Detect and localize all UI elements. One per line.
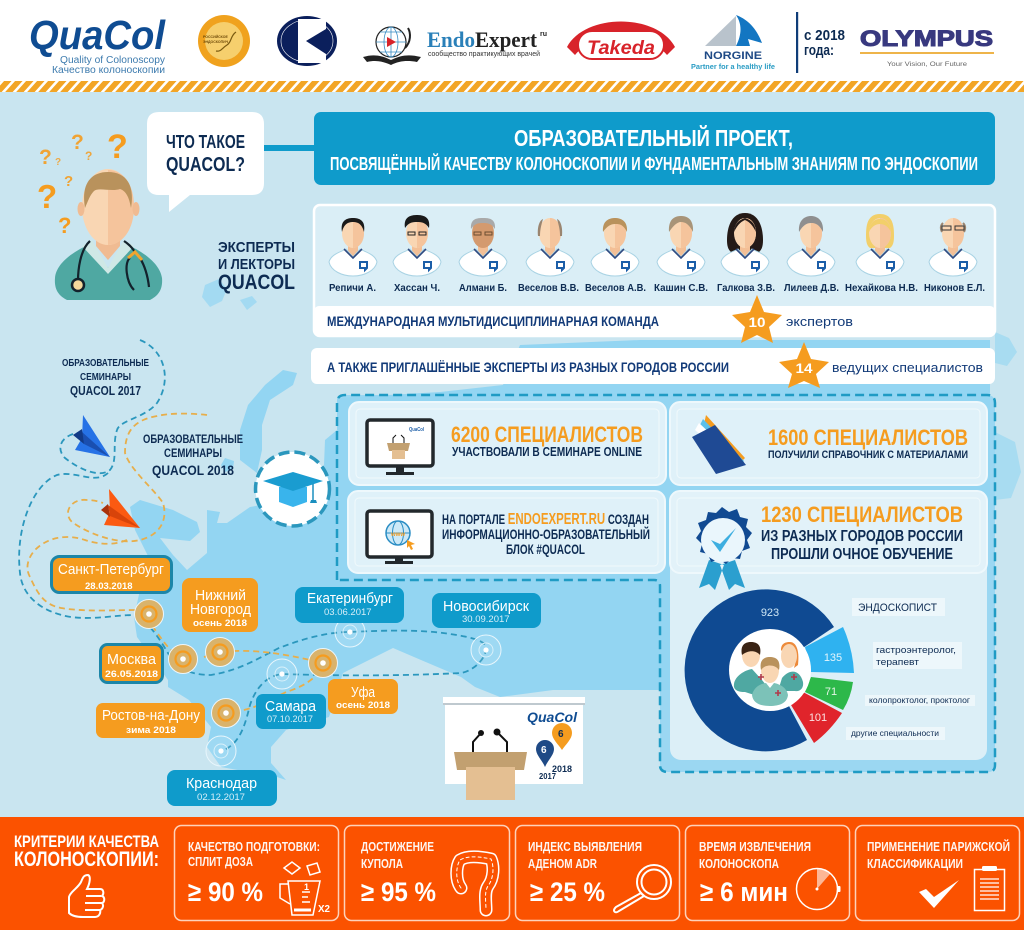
question marks: ? bbox=[64, 173, 73, 190]
city: Krasnodar: 02.12.2017 bbox=[197, 792, 245, 803]
strip: international team: МЕЖДУНАРОДНАЯ МУЛЬТИДИСЦИПЛИНАРНАЯ КОМАНДА bbox=[327, 314, 659, 329]
chart legend: ЭНДОСКОПИСТ bbox=[858, 602, 937, 614]
card: in-person training and chart bbox=[670, 491, 987, 760]
speech bubble: what is QuaCol: QUACOL? bbox=[166, 154, 245, 176]
city: Samara: 07.10.2017 bbox=[267, 714, 313, 725]
label: seminars 2017: СЕМИНАРЫ bbox=[80, 371, 131, 383]
logo: Takeda bbox=[567, 22, 675, 59]
box: cecum reach: ДОСТИЖЕНИЕ bbox=[361, 840, 434, 854]
illustration: podium and board: 2017 bbox=[539, 772, 557, 781]
logo: Takeda: Takeda bbox=[587, 38, 655, 59]
city: Novosibirsk: 30.09.2017 bbox=[462, 614, 510, 625]
divider and since 2018 label bbox=[796, 12, 845, 73]
logo: endoscopy society seal: РОССИЙСКОЕ bbox=[203, 35, 228, 39]
stat area dashed frame bbox=[337, 395, 995, 772]
expert: Repichi bbox=[329, 218, 377, 276]
speech bubble: what is QuaCol: ЧТО ТАКОЕ bbox=[166, 132, 245, 152]
icon: book bbox=[692, 415, 746, 474]
footer heading bbox=[14, 833, 159, 871]
card: handbook: 1600 СПЕЦИАЛИСТОВ bbox=[768, 425, 968, 450]
city: Yekaterinburg: 03.06.2017 bbox=[324, 607, 372, 618]
donut chart: 135 bbox=[824, 652, 842, 664]
footer heading: КРИТЕРИИ КАЧЕСТВА bbox=[14, 833, 159, 851]
city: Nizhny Novgorod bbox=[182, 578, 258, 632]
icon: measuring jug: 1 bbox=[304, 882, 309, 892]
chart legend: терапевт bbox=[876, 657, 920, 668]
logo: QuaCol bbox=[29, 12, 166, 76]
card: online seminar bbox=[349, 402, 666, 485]
city: Novosibirsk: Новосибирск bbox=[443, 598, 529, 615]
card: endoexpert portal: ИНФОРМАЦИОННО-ОБРАЗОВАТЕЛЬНЫЙ bbox=[442, 527, 650, 542]
logo: Olympus: Your Vision, Our Future bbox=[887, 61, 967, 68]
heading: experts and lecturers: ЭКСПЕРТЫ bbox=[218, 239, 295, 256]
expert: Veselov A.V. bbox=[591, 218, 639, 276]
icon: magnifying glass bbox=[614, 865, 671, 912]
city: Saint Petersburg bbox=[52, 556, 172, 592]
label: seminars 2018: QUACOL 2018 bbox=[152, 462, 234, 478]
card: in-person training and chart: 1230 СПЕЦИАЛИСТОВ bbox=[761, 502, 963, 527]
panel: experts bbox=[314, 205, 995, 336]
expert names: Хассан Ч. bbox=[394, 282, 440, 294]
city: Moscow: Москва bbox=[107, 651, 157, 668]
strip: international team: 10 bbox=[748, 314, 766, 330]
illustration: podium and board: 6 bbox=[558, 729, 564, 740]
heading: experts and lecturers: QUACOL bbox=[218, 271, 295, 294]
expert: Nekhaikova bbox=[856, 214, 904, 276]
icon: doctor with question marks bbox=[37, 128, 162, 300]
box: withdrawal time: ≥ 6 мин bbox=[700, 877, 788, 907]
logo: Norgine bbox=[691, 15, 775, 71]
chart legend bbox=[846, 598, 975, 740]
city: Saint Petersburg: 28.03.2018 bbox=[85, 581, 133, 592]
chart legend: колопроктолог, проктолог bbox=[869, 696, 970, 705]
expert: Lileev bbox=[787, 216, 835, 276]
icon: blue paper plane bbox=[73, 415, 110, 457]
logo: Olympus bbox=[860, 26, 994, 68]
expert names: Веселов В.В. bbox=[518, 282, 579, 294]
box: cecum reach: ≥ 95 % bbox=[361, 877, 436, 907]
expert: Almani bbox=[459, 218, 507, 276]
strip: invited experts: А ТАКЖЕ ПРИГЛАШЁННЫЕ ЭКСПЕРТЫ ИЗ РАЗНЫХ ГОРОДОВ РОССИИ bbox=[327, 360, 729, 375]
city: Ufa bbox=[328, 679, 398, 714]
divider and since 2018 label: с 2018 bbox=[804, 27, 845, 44]
logo: EndoExpert bbox=[363, 27, 547, 65]
question marks: ? bbox=[71, 131, 84, 154]
illustration: podium and board: 6 bbox=[541, 745, 547, 756]
box: withdrawal time: КОЛОНОСКОПА bbox=[699, 857, 779, 871]
question marks: ? bbox=[58, 213, 71, 238]
icon: award rosette bbox=[696, 507, 752, 590]
box: withdrawal time: ВРЕМЯ ИЗВЛЕЧЕНИЯ bbox=[699, 840, 811, 854]
logo: endoscopy society seal: ЭНДОСКОПИЧ. bbox=[203, 40, 229, 44]
icon: monitor with podium: QuaCol bbox=[409, 427, 425, 433]
city: Yekaterinburg bbox=[295, 587, 404, 623]
icon: graduation cap bbox=[256, 452, 330, 526]
heading: experts and lecturers: И ЛЕКТОРЫ bbox=[218, 256, 295, 273]
donut chart: 101 bbox=[809, 712, 827, 724]
logo: endoscopy society seal bbox=[198, 15, 250, 67]
expert: Veselov V.V. bbox=[526, 218, 574, 276]
strip: international team bbox=[314, 295, 995, 343]
card: online seminar: УЧАСТВОВАЛИ В СЕМИНАРЕ ONLINE bbox=[452, 445, 642, 459]
illustration: podium and board: 2018 bbox=[552, 764, 572, 774]
label: seminars 2018: ОБРАЗОВАТЕЛЬНЫЕ bbox=[143, 434, 243, 446]
box: bowel preparation: КАЧЕСТВО ПОДГОТОВКИ: bbox=[188, 840, 320, 854]
donut chart: 71 bbox=[825, 686, 837, 698]
city: Samara bbox=[256, 694, 326, 729]
strip: international team: экспертов bbox=[786, 314, 853, 329]
expert names: Никонов Е.Л. bbox=[924, 282, 985, 294]
expert: Galkova bbox=[721, 213, 769, 276]
box: bowel preparation: ≥ 90 % bbox=[188, 877, 263, 907]
illustration: podium and board: QuaCol bbox=[527, 709, 578, 725]
icon: check mark bbox=[919, 880, 959, 908]
logo: QuaCol: Качество колоноскопии bbox=[52, 65, 165, 76]
icon: monitor with globe bbox=[367, 511, 432, 564]
city: Krasnodar bbox=[167, 770, 277, 806]
logo: Olympus: OLYMPUS bbox=[860, 26, 993, 51]
icon: clipboard bbox=[974, 866, 1004, 910]
donut chart: 923 bbox=[761, 607, 779, 619]
icon: colon bbox=[457, 857, 493, 910]
illustration: podium and board bbox=[443, 697, 585, 800]
title banner bbox=[314, 112, 995, 185]
logo: coloproctology association bbox=[277, 16, 337, 66]
city: Nizhny Novgorod: Новгород bbox=[190, 601, 251, 618]
box: ADR index: ≥ 25 % bbox=[530, 877, 605, 907]
icon: timer bbox=[796, 868, 840, 910]
connector bbox=[264, 145, 316, 151]
card: endoexpert portal: БЛОК #QUACOL bbox=[506, 542, 585, 557]
expert: Nikonov bbox=[929, 218, 977, 276]
icon: monitor with globe: www bbox=[390, 532, 405, 538]
box: bowel preparation: СПЛИТ ДОЗА bbox=[188, 855, 253, 869]
title banner: ОБРАЗОВАТЕЛЬНЫЙ ПРОЕКТ, bbox=[514, 124, 793, 151]
logo: QuaCol: QuaCol bbox=[29, 12, 166, 58]
footer: quality criteria bbox=[0, 817, 1024, 930]
question marks: ? bbox=[39, 146, 52, 169]
city: Novosibirsk bbox=[432, 593, 541, 628]
icon: medical team bbox=[734, 642, 803, 706]
card: handbook bbox=[670, 402, 987, 485]
box: ADR index: ИНДЕКС ВЫЯВЛЕНИЯ bbox=[528, 840, 642, 854]
expert names bbox=[329, 282, 985, 294]
logo: EndoExpert: EndoExpert bbox=[427, 27, 538, 52]
chart legend: другие специальности bbox=[851, 728, 939, 738]
label: seminars 2017: ОБРАЗОВАТЕЛЬНЫЕ bbox=[62, 357, 149, 369]
city: Ufa: осень 2018 bbox=[336, 700, 390, 711]
city: Krasnodar: Краснодар bbox=[186, 775, 257, 792]
card: handbook: ПОЛУЧИЛИ СПРАВОЧНИК С МАТЕРИАЛАМИ bbox=[768, 449, 968, 461]
city: Saint Petersburg: Санкт-Петербург bbox=[58, 561, 164, 578]
expert: Hassan bbox=[393, 215, 441, 276]
city: Ufa: Уфа bbox=[351, 684, 376, 701]
icon: thumbs up bbox=[69, 875, 104, 917]
expert names: Галкова З.В. bbox=[717, 282, 775, 294]
heading: experts and lecturers bbox=[218, 239, 295, 294]
box: Paris classification bbox=[856, 826, 1020, 920]
card: in-person training and chart: ИЗ РАЗНЫХ ГОРОДОВ РОССИИ bbox=[761, 528, 963, 545]
expert names: Лилеев Д.В. bbox=[784, 282, 839, 294]
logo: EndoExpert: сообщество практикующих врачей bbox=[428, 50, 540, 58]
expert names: Репичи А. bbox=[329, 282, 376, 294]
strip: invited experts: 14 bbox=[796, 360, 813, 376]
box: bowel preparation bbox=[174, 826, 338, 920]
logo: QuaCol: Quality of Colonoscopy bbox=[60, 55, 165, 66]
card: endoexpert portal: НА ПОРТАЛЕ ENDOEXPERT.RU СОЗДАН bbox=[442, 511, 649, 528]
city: Rostov-on-Don bbox=[96, 703, 205, 738]
box: ADR index: АДЕНОМ ADR bbox=[528, 857, 597, 871]
question marks: ? bbox=[107, 128, 128, 166]
city: Nizhny Novgorod: осень 2018 bbox=[193, 618, 247, 629]
donut chart bbox=[685, 589, 854, 751]
box: withdrawal time bbox=[686, 826, 850, 920]
label: seminars 2017 bbox=[62, 357, 149, 398]
icon: orange paper plane bbox=[101, 489, 140, 528]
expert names: Веселов А.В. bbox=[585, 282, 646, 294]
logo: Norgine: Partner for a healthy life bbox=[691, 62, 775, 71]
divider and since 2018 label: года: bbox=[804, 42, 834, 59]
speech bubble: what is QuaCol bbox=[147, 112, 264, 212]
expert names: Кашин С.В. bbox=[654, 282, 708, 294]
question marks: ? bbox=[55, 157, 61, 168]
strip: invited experts: ведущих специалистов bbox=[832, 360, 983, 375]
map of Russia bbox=[130, 279, 1021, 780]
question marks bbox=[37, 128, 128, 238]
label: seminars 2018 bbox=[143, 434, 243, 478]
hazard stripe divider bbox=[0, 81, 1024, 92]
city: Yekaterinburg: Екатеринбург bbox=[307, 590, 393, 607]
location targets bbox=[134, 600, 501, 766]
footer heading: КОЛОНОСКОПИИ: bbox=[14, 848, 159, 871]
expert names: Нехайкова Н.В. bbox=[845, 282, 918, 294]
icon: measuring jug bbox=[280, 862, 330, 915]
strip: invited experts bbox=[311, 342, 995, 388]
header white band bbox=[0, 0, 1024, 81]
city: Samara: Самара bbox=[265, 698, 317, 715]
box: Paris classification: КЛАССИФИКАЦИИ bbox=[867, 857, 963, 871]
city: Moscow: 26.05.2018 bbox=[105, 669, 158, 680]
label: seminars 2018: СЕМИНАРЫ bbox=[164, 448, 222, 460]
card: endoexpert portal bbox=[348, 491, 665, 573]
logo: EndoExpert: ru bbox=[540, 31, 547, 38]
expert: Kashin bbox=[657, 216, 705, 276]
city: Nizhny Novgorod: Нижний bbox=[195, 587, 246, 604]
city: Moscow bbox=[100, 644, 162, 682]
card: in-person training and chart: ПРОШЛИ ОЧНОЕ ОБУЧЕНИЕ bbox=[771, 546, 953, 563]
question marks: ? bbox=[85, 149, 92, 163]
icon: monitor with podium bbox=[367, 420, 433, 475]
box: ADR index bbox=[516, 826, 680, 920]
icon: measuring jug: X2 bbox=[318, 904, 330, 915]
dashed routes bbox=[19, 340, 486, 751]
card: online seminar: 6200 СПЕЦИАЛИСТОВ bbox=[451, 422, 643, 447]
city: Rostov-on-Don: Ростов-на-Дону bbox=[102, 707, 200, 724]
box: cecum reach: КУПОЛА bbox=[361, 857, 403, 871]
expert names: Алмани Б. bbox=[459, 282, 507, 294]
label: seminars 2017: QUACOL 2017 bbox=[70, 384, 141, 398]
box: cecum reach bbox=[344, 826, 510, 920]
city: Rostov-on-Don: зима 2018 bbox=[126, 725, 176, 736]
chart legend: гастроэнтеролог, bbox=[876, 645, 956, 656]
logo: Norgine: NORGINE bbox=[704, 50, 762, 62]
question marks: ? bbox=[37, 178, 57, 215]
